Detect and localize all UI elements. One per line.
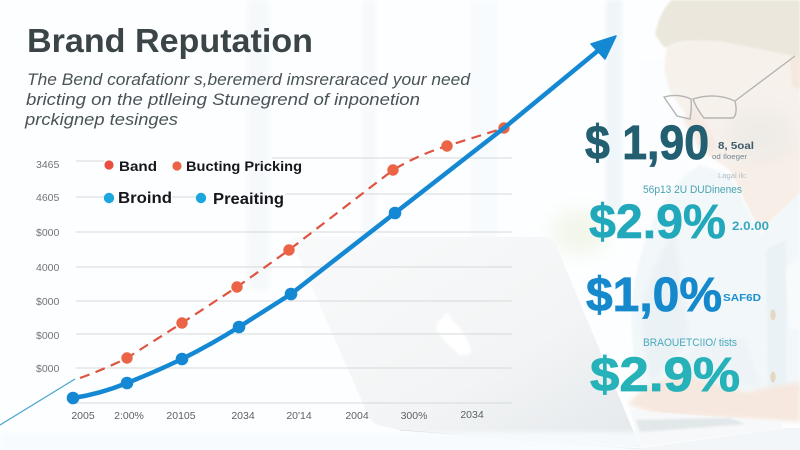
y axis labels: $000 <box>36 227 60 239</box>
icon: arrow head <box>591 36 616 59</box>
stat: $1,90: od Iloeger <box>712 152 748 161</box>
subtitle text block <box>24 70 471 129</box>
legend: Preaiting <box>213 191 284 208</box>
stat: $2.9% lower: BRAOUETCIIO/ tists <box>643 337 737 349</box>
y axis labels: $000 <box>36 330 60 342</box>
icon: glasses <box>664 56 795 119</box>
laptop <box>290 237 640 449</box>
stat: $1,90: $ 1,90 <box>585 117 709 170</box>
legend: Bucting Pricking <box>186 159 302 174</box>
title: Brand Reputation <box>27 22 313 59</box>
legend: Band <box>119 159 157 174</box>
stat: $2.9%: 2.0.00 <box>732 219 769 233</box>
y axis labels: 3465 <box>36 159 60 171</box>
line chart <box>0 36 616 425</box>
x axis labels: 2034 <box>460 409 484 421</box>
stat: $1,90: 8, 5oal <box>718 140 754 152</box>
y axis labels: $000 <box>36 296 60 308</box>
stat: $2.9%: 56p13 2U DUDinenes <box>643 184 742 196</box>
y axis labels <box>36 159 60 375</box>
y axis labels: 4000 <box>36 262 60 274</box>
stat: $1,90: Lagal ilc <box>718 173 747 180</box>
y axis labels: 4605 <box>36 192 60 204</box>
stat: $2.9%: $2.9% <box>589 196 726 249</box>
legend <box>104 159 302 208</box>
stat: $1,0%: SAF6D <box>723 292 761 304</box>
x axis labels: 2:00% <box>114 410 144 422</box>
legend: Broind <box>118 190 172 207</box>
x axis labels: 300% <box>401 410 427 422</box>
red dashed series <box>80 122 510 378</box>
x axis labels: 2004 <box>345 410 369 422</box>
x axis labels: 20'14 <box>286 410 312 422</box>
subtitle text block: prckignep tesinges <box>24 110 179 129</box>
x axis labels: 2005 <box>71 410 95 422</box>
x axis labels: 20105 <box>166 410 196 422</box>
hands on keyboard <box>628 375 800 447</box>
stat: $1,90 <box>585 117 754 180</box>
blue series with arrow <box>67 36 616 404</box>
stat: $2.9% <box>589 184 769 249</box>
stat: $2.9% lower: $2.9% <box>590 349 740 402</box>
subtitle text block: bricting on the ptlleing Stunegrend of inponetion <box>26 90 420 109</box>
y axis labels: $000 <box>36 363 60 375</box>
subtitle text block: The Bend corafationr s,beremerd imsreraraced your need <box>27 70 471 89</box>
chart gridlines <box>76 158 512 403</box>
stats panel <box>585 117 769 402</box>
x axis labels: 2034 <box>231 410 255 422</box>
thin teal line <box>0 379 75 425</box>
stat: $1,0%: $1,0% <box>586 269 722 322</box>
x axis labels <box>71 409 484 422</box>
